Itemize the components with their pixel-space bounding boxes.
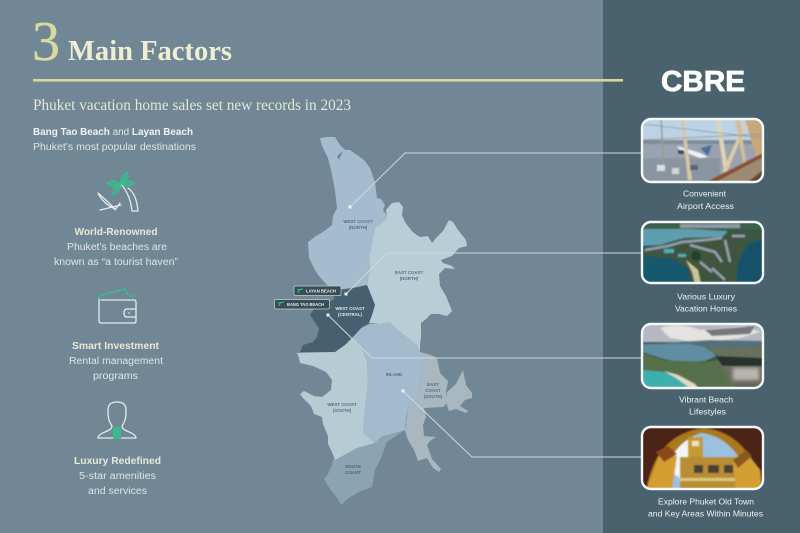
factor: smart investment: Smart Investment: [72, 341, 160, 352]
panel: right sidebar: [603, 0, 800, 533]
region labels: INLAND: [386, 372, 402, 377]
connector: airport: [348, 153, 641, 208]
factor: smart investment: programs: [93, 371, 138, 382]
label: Layan Beach: LAYAN BEACH: [306, 289, 337, 294]
region labels: COAST: [425, 388, 441, 393]
factor: world-renowned: Phuket’s beaches are: [67, 242, 167, 253]
connector: luxury homes: [344, 253, 641, 296]
icon: person with tie: [98, 402, 136, 439]
region labels: EAST COAST: [395, 270, 423, 275]
caption: old town: and Key Areas Within Minutes: [648, 508, 763, 518]
photo card: old town: [640, 425, 765, 492]
region labels: (CENTRAL): [338, 312, 362, 317]
caption: luxury homes: Vacation Homes: [675, 304, 737, 314]
caption: old town: [648, 496, 763, 518]
title: Main Factors: [68, 35, 232, 67]
factor: world-renowned: World-Renowned: [74, 227, 158, 238]
factor: luxury redefined: 5-star amenities: [79, 471, 156, 482]
region labels: (SOUTH): [424, 394, 443, 399]
region: west coast south: [297, 338, 375, 460]
region: south coast: [324, 430, 405, 505]
caption: old town: Explore Phuket Old Town: [658, 496, 754, 506]
factor: luxury redefined: [74, 402, 161, 497]
region labels: COAST: [345, 470, 361, 475]
title: [32, 11, 232, 73]
icon: wallet: [99, 289, 136, 323]
icon: palm and beach chair: [98, 172, 138, 211]
photo card: luxury homes: [640, 220, 765, 286]
subtitle: Phuket vacation home sales set new records in 2023: [33, 97, 351, 114]
region labels: WEST COAST: [335, 306, 365, 311]
region labels: [327, 219, 443, 475]
caption: luxury homes: Various Luxury: [677, 292, 736, 302]
title rule: [33, 79, 623, 82]
caption: beach lifestyles: Lifestyles: [689, 406, 726, 416]
region: west coast central: [300, 285, 375, 352]
photo card: airport: [640, 117, 765, 185]
caption: airport: Convenient: [683, 188, 727, 198]
logo: CBRE: CBRE: [661, 66, 745, 98]
region labels: EAST: [427, 382, 439, 387]
region labels: WEST COAST: [343, 219, 373, 224]
caption: airport: Airport Access: [677, 201, 734, 211]
inlet: [337, 151, 343, 160]
region labels: (NORTH): [400, 276, 419, 281]
label: Bang Tao Beach: [274, 300, 330, 309]
label: Bang Tao Beach: BANG TAO BEACH: [287, 302, 325, 307]
region labels: (NORTH): [349, 225, 368, 230]
factor: smart investment: [69, 289, 163, 382]
map of Phuket: [297, 137, 472, 505]
caption: luxury homes: [675, 292, 737, 314]
photo card: beach lifestyles: [640, 322, 765, 390]
intro text: [33, 127, 196, 153]
factor: luxury redefined: Luxury Redefined: [74, 456, 161, 467]
factor: luxury redefined: and services: [88, 486, 147, 497]
factor: world-renowned: [54, 172, 178, 268]
intro text: Phuket’s most popular destinations: [33, 142, 196, 153]
caption: airport: [677, 188, 734, 211]
region: west coast north: [308, 137, 387, 290]
connector: old town: [402, 390, 641, 457]
region labels: WEST COAST: [327, 402, 357, 407]
region labels: (SOUTH): [333, 408, 352, 413]
region labels: SOUTH: [345, 464, 361, 469]
caption: beach lifestyles: [679, 394, 733, 416]
factor: smart investment: Rental management: [69, 356, 163, 367]
title: 3: [32, 11, 60, 73]
region: east coast north: [367, 202, 467, 352]
factor: world-renowned: known as “a tourist haven”: [54, 257, 178, 268]
intro text: Bang Tao Beach and Layan Beach: [33, 127, 193, 138]
label: Layan Beach: [294, 286, 341, 296]
caption: beach lifestyles: Vibrant Beach: [679, 394, 733, 404]
connector: beach lifestyles: [326, 314, 641, 358]
region: east coast south: [405, 352, 472, 472]
region: inland: [352, 322, 420, 443]
